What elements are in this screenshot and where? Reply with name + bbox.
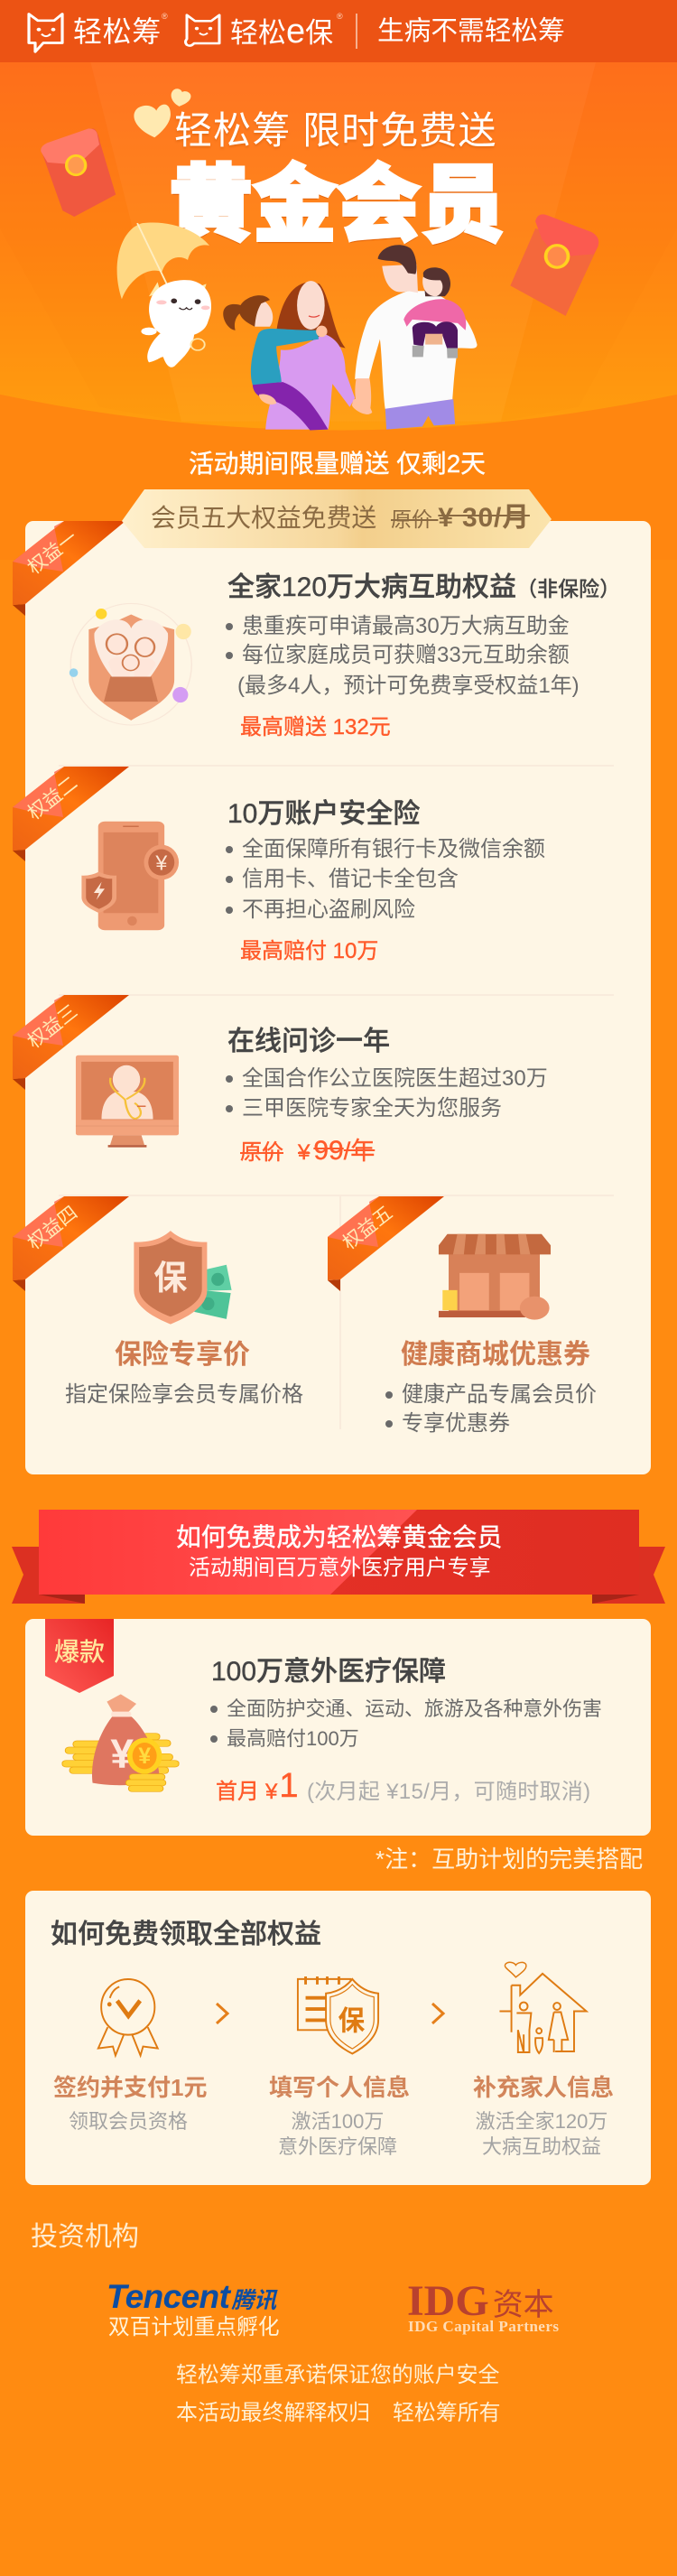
icon: form with shield: 保 — [338, 2005, 365, 2036]
step 1 text: 领取会员资格 — [69, 2110, 188, 2133]
icon: award badge — [97, 1978, 159, 2059]
arrow — [431, 2003, 446, 2024]
benefit 1 bullets: 患重疾可申请最高30万大病互助金 — [242, 614, 570, 638]
benefit 1 bullets: (最多4人，预计可免费享受权益1年) — [237, 674, 580, 698]
step 3 text: 大病互助权益 — [482, 2135, 601, 2158]
illustration: family — [223, 245, 478, 430]
benefit 2 bullets — [226, 837, 545, 922]
ribbon: 权益五: 权益五 — [339, 1203, 396, 1254]
price: 首月 ¥1 — [216, 1767, 298, 1805]
claim heading: 如何免费领取全部权益 — [51, 1920, 321, 1949]
step 2 label: 填写个人信息 — [269, 2074, 410, 2101]
Tencent caption: 双百计划重点孵化 — [108, 2316, 280, 2339]
icon: family shield — [69, 603, 192, 726]
icon: 轻松e保 cat logo — [184, 14, 220, 47]
accident cover title: 100万意外医疗保障 — [211, 1657, 446, 1687]
divider — [59, 765, 614, 767]
arrow — [216, 2003, 229, 2024]
banner text: 会员五大权益免费送 — [151, 504, 376, 532]
panel: five benefits card — [25, 521, 651, 1474]
step 2 text — [278, 2110, 397, 2158]
icon: money bag with coins: ¥ — [110, 1730, 134, 1777]
benefit 5 bullets: 健康产品专属会员价 — [402, 1382, 597, 1407]
banner subtitle: 活动期间百万意外医疗用户专享 — [189, 1556, 490, 1580]
benefit 5 bullets: 专享优惠券 — [402, 1411, 510, 1436]
girl — [251, 329, 319, 385]
icon: right red envelope — [511, 214, 599, 316]
slogan: 生病不需轻松筹 — [377, 16, 565, 46]
benefit 2 bullets: 信用卡、借记卡全包含 — [242, 867, 459, 891]
banner: how to become gold member — [12, 1510, 665, 1604]
man — [385, 399, 455, 430]
step 1 label: 签约并支付1元 — [53, 2074, 207, 2101]
registered mark: ® — [337, 12, 343, 21]
step 3 text — [476, 2110, 607, 2158]
benefit 2 bullets: 不再担心盗刷风险 — [242, 897, 415, 922]
benefit 3 bullets: 三甲医院专家全天为您服务 — [242, 1096, 502, 1121]
investors heading: 投资机构 — [31, 2222, 139, 2252]
icon: online doctor monitor — [76, 1055, 179, 1148]
benefit 3 original price: 原价 ¥99/年 — [240, 1136, 375, 1166]
IDG caption: IDG Capital Partners — [408, 2318, 559, 2335]
note: *注：互助计划的完美搭配 — [376, 1846, 643, 1873]
header bar — [0, 0, 677, 62]
icon: 轻松筹 cat logo — [27, 13, 64, 53]
tag: 爆款: 爆款 — [54, 1638, 105, 1666]
logo text: 轻松筹: 轻松筹 — [73, 15, 162, 48]
tag: 爆款 — [45, 1619, 114, 1693]
registered mark: ® — [162, 12, 168, 21]
icon: insurance shield with money: 保 — [153, 1259, 188, 1297]
ribbon: 权益一 — [13, 521, 124, 616]
logo text: 轻松e保: 轻松e保 — [230, 13, 333, 51]
ribbon: 权益四: 权益四 — [24, 1203, 81, 1254]
accident cover bullets: 最高赔付100万 — [227, 1727, 359, 1750]
ribbon: 权益二: 权益二 — [24, 773, 81, 824]
panel: accident cover card — [25, 1619, 651, 1836]
accident cover bullets: 全面防护交通、运动、旅游及各种意外伤害 — [227, 1697, 602, 1720]
girl pants and hand — [253, 382, 329, 430]
ribbon: 权益一: 权益一 — [24, 527, 81, 579]
icon: insurance shield with money — [134, 1231, 231, 1325]
ribbon: 权益四 — [13, 1196, 129, 1291]
ribbon: 权益五 — [328, 1196, 444, 1291]
header divider — [356, 14, 357, 49]
benefit 1 title: 全家120万大病互助权益（非保险） — [227, 572, 620, 602]
benefit 3 bullets — [226, 1066, 548, 1121]
icon: phone with shield — [81, 822, 179, 930]
benefit 1 value: 最高赠送 132元 — [240, 715, 391, 739]
panel: how to claim card — [25, 1891, 651, 2185]
icon: money bag with coins — [61, 1694, 180, 1792]
icon: money bag with coins: ¥ — [138, 1744, 151, 1769]
ribbon: 权益二 — [13, 767, 129, 861]
hero subtitle: 活动期间限量赠送 仅剩2天 — [189, 450, 486, 478]
benefit 2 value: 最高赔付 10万 — [240, 939, 378, 963]
accident cover bullets — [210, 1697, 602, 1750]
logo: Tencent: Tencent腾讯 — [107, 2278, 276, 2315]
benefit 2 bullets: 全面保障所有银行卡及微信余额 — [242, 837, 545, 861]
footer line 2: 本活动最终解释权归 轻松筹所有 — [176, 2401, 500, 2425]
step 2 text: 意外医疗保障 — [278, 2135, 397, 2158]
icon: left red envelope — [41, 128, 116, 217]
original price: 原价 ¥ 30/月 — [391, 503, 530, 533]
banner: five benefits free — [122, 489, 552, 548]
icon: hearts — [134, 88, 191, 137]
icon: form with shield — [296, 1976, 379, 2055]
hero background — [0, 0, 677, 560]
step 3 label: 补充家人信息 — [473, 2074, 614, 2101]
icon: store — [439, 1233, 551, 1320]
ribbon: 权益三: 权益三 — [24, 1001, 81, 1053]
banner title: 如何免费成为轻松筹黄金会员 — [176, 1523, 502, 1551]
step 3 text: 激活全家120万 — [476, 2110, 607, 2133]
price note: (次月起 ¥15/月，可随时取消) — [307, 1780, 590, 1804]
benefit 4 heading: 保险专享价 — [115, 1340, 250, 1370]
benefit 1 bullets — [226, 614, 580, 698]
woman — [276, 282, 346, 349]
benefit 5 heading: 健康商城优惠券 — [401, 1340, 590, 1370]
benefit 4 text: 指定保险享会员专属价格 — [65, 1382, 303, 1407]
benefit 3 bullets: 全国合作公立医院医生超过30万 — [242, 1066, 548, 1091]
illustration: umbrella and cat — [117, 222, 211, 367]
benefit 5 bullets — [385, 1382, 597, 1436]
benefit 2 title: 10万账户安全险 — [227, 799, 420, 829]
baby — [423, 267, 450, 296]
hero title line: 轻松筹 限时免费送 — [174, 109, 497, 152]
icon: phone with shield: ¥ — [154, 851, 167, 874]
footer line 1: 轻松筹郑重承诺保证您的账户安全 — [176, 2363, 499, 2387]
benefit 1 bullets: 每位家庭成员可获赠33元互助余额 — [242, 643, 570, 667]
icon: house with family — [499, 1961, 589, 2055]
benefit 3 title: 在线问诊一年 — [227, 1027, 390, 1056]
step 2 text: 激活100万 — [292, 2110, 384, 2133]
ribbon: 权益三 — [13, 995, 129, 1090]
hero main title: 黄金会员: 黄金会员 — [169, 158, 505, 252]
logo: IDG: IDG资本 — [407, 2277, 554, 2325]
